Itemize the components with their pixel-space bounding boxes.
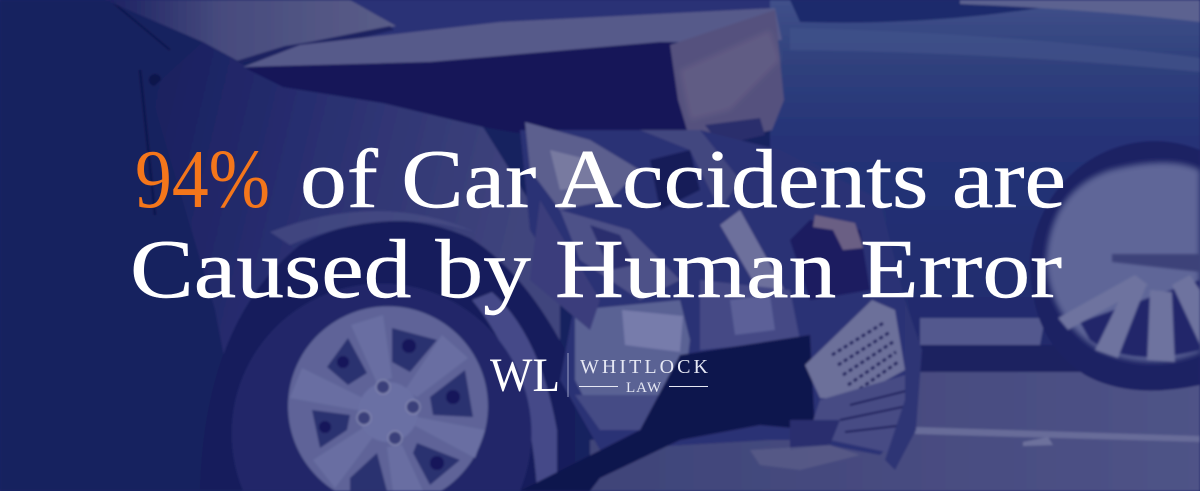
windshield	[105, 0, 396, 62]
logo monogram WL: WL	[490, 349, 560, 402]
crash damage engine bay	[520, 122, 915, 491]
wiper	[236, 26, 394, 63]
headline highlighted figure: 94%	[135, 133, 270, 226]
sky band behind the wreck	[340, 0, 780, 40]
wheel arch shadow	[200, 221, 575, 491]
headline line 1: of Car Accidents are	[300, 133, 1066, 226]
door and left side of crashed car	[110, 0, 170, 215]
grille and bumper	[750, 300, 922, 470]
hub cap	[288, 306, 488, 491]
logo sub wordmark with rules: LAW	[626, 380, 662, 396]
logo divider	[568, 353, 569, 397]
logo: Whitlock Law	[490, 349, 709, 402]
road surface	[590, 372, 1200, 491]
under-hood dark cavity	[245, 35, 690, 150]
passing blue car body	[770, 0, 1200, 380]
tyre	[232, 283, 532, 491]
headline line 2: Caused by Human Error	[130, 223, 1062, 316]
logo wordmark: WHITLOCK	[580, 356, 709, 378]
raised hood	[243, 8, 782, 67]
crumpled hood corner	[670, 10, 784, 140]
logo sub wordmark with rules	[579, 380, 708, 396]
front fender	[150, 42, 560, 491]
headline	[130, 133, 1066, 316]
blurred wheel of passing car	[1030, 141, 1200, 391]
